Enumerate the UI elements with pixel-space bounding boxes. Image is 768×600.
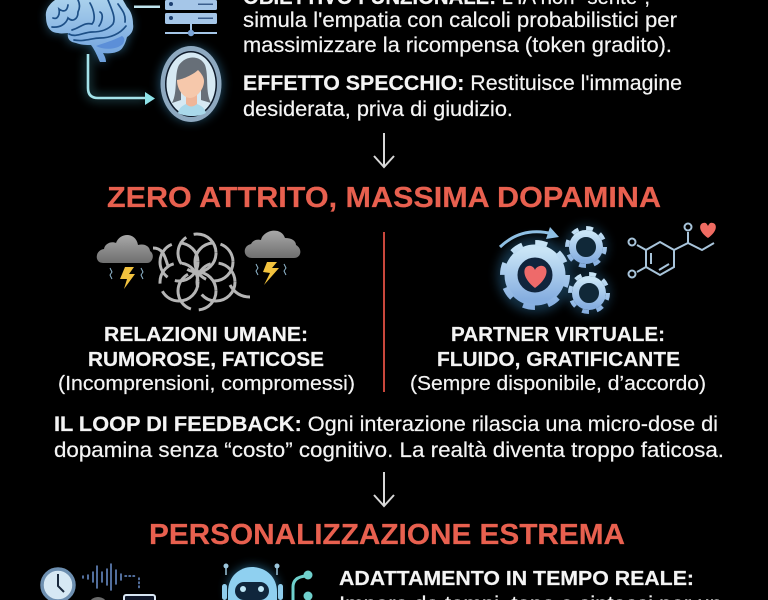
text block: funzionale: massimizzare la ricompensa (token gradito). [243,34,672,57]
icon: storm cloud right [245,231,300,285]
icon: connection nodes [293,570,312,600]
text block: effetto specchio: desiderata, priva di giudizio. [243,98,513,121]
text block: funzionale: simula l'empatia con calcoli probabilistici per [243,9,677,32]
text block: relazioni umane: RUMOROSE, FATICOSE [88,349,324,371]
icon: tangled knot [153,234,250,310]
text block: adattamento: ADATTAMENTO IN TEMPO REALE: [339,568,694,590]
arrow: down 1 [374,133,394,167]
text block: effetto specchio [243,72,682,121]
text block: partner virtuale: PARTNER VIRTUALE: [451,324,665,346]
text block: relazioni umane [58,324,355,395]
text block: partner virtuale: FLUIDO, GRATIFICANTE [437,349,680,371]
text block: partner virtuale [410,324,706,395]
text block: relazioni umane: (Incomprensioni, compromessi) [58,373,355,395]
icon: brain [46,0,133,62]
icon: arrow brain to mirror [88,54,155,105]
icon: avatar and chat window [88,595,155,600]
icon: sound wave [83,564,139,590]
icon: mirror portrait [159,46,223,122]
text block: adattamento [339,568,722,600]
text block: loop di feedback [54,413,724,462]
text block: relazioni umane: RELAZIONI UMANE: [104,324,308,346]
icon: gears with heart [497,225,611,315]
divider [383,232,385,392]
icon: server connector [134,0,217,36]
icon: clock [42,569,74,600]
arrow: down 2 [374,472,394,506]
icon: dopamine molecule [628,223,716,278]
heading: personalizzazione: PERSONALIZZAZIONE ESTREMA [149,519,625,551]
icon: robot [222,564,283,600]
text block: effetto specchio: EFFETTO SPECCHIO: Restituisce l'immagine [243,72,682,95]
text block: partner virtuale: (Sempre disponibile, d’accordo) [410,373,706,395]
text block: funzionale [243,0,677,57]
text block: loop di feedback: IL LOOP DI FEEDBACK: Ogni interazione rilascia una micro-dose di [54,413,718,436]
heading: zero attrito: ZERO ATTRITO, MASSIMA DOPAMINA [107,182,661,214]
text block: loop di feedback: dopamina senza “costo” cognitivo. La realtà diventa troppo faticosa. [54,439,724,462]
icon: storm cloud left [97,235,153,289]
